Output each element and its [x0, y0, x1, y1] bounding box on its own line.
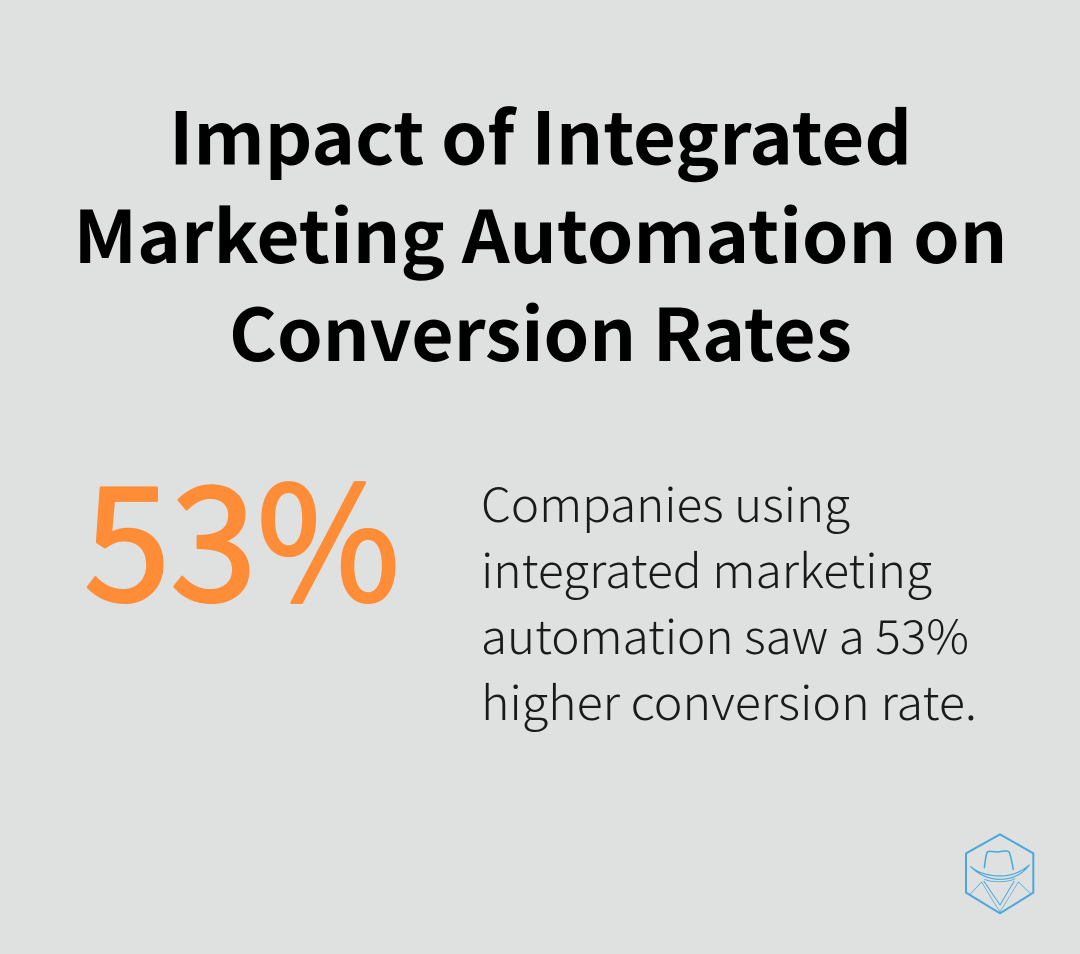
title: Impact of Integrated [169, 80, 912, 186]
description text: higher conversion rate. [481, 665, 977, 734]
title: Marketing Automation on [74, 179, 1008, 284]
title: Conversion Rates [229, 277, 852, 382]
icon: hexagon logo with spy hat [966, 834, 1033, 913]
description text: integrated marketing [481, 533, 932, 602]
title [74, 80, 1008, 382]
description text [481, 467, 977, 734]
description text: automation saw a 53% [481, 599, 969, 668]
description text: Companies using [481, 467, 850, 536]
big statistic: 53%: 53% [84, 418, 400, 646]
